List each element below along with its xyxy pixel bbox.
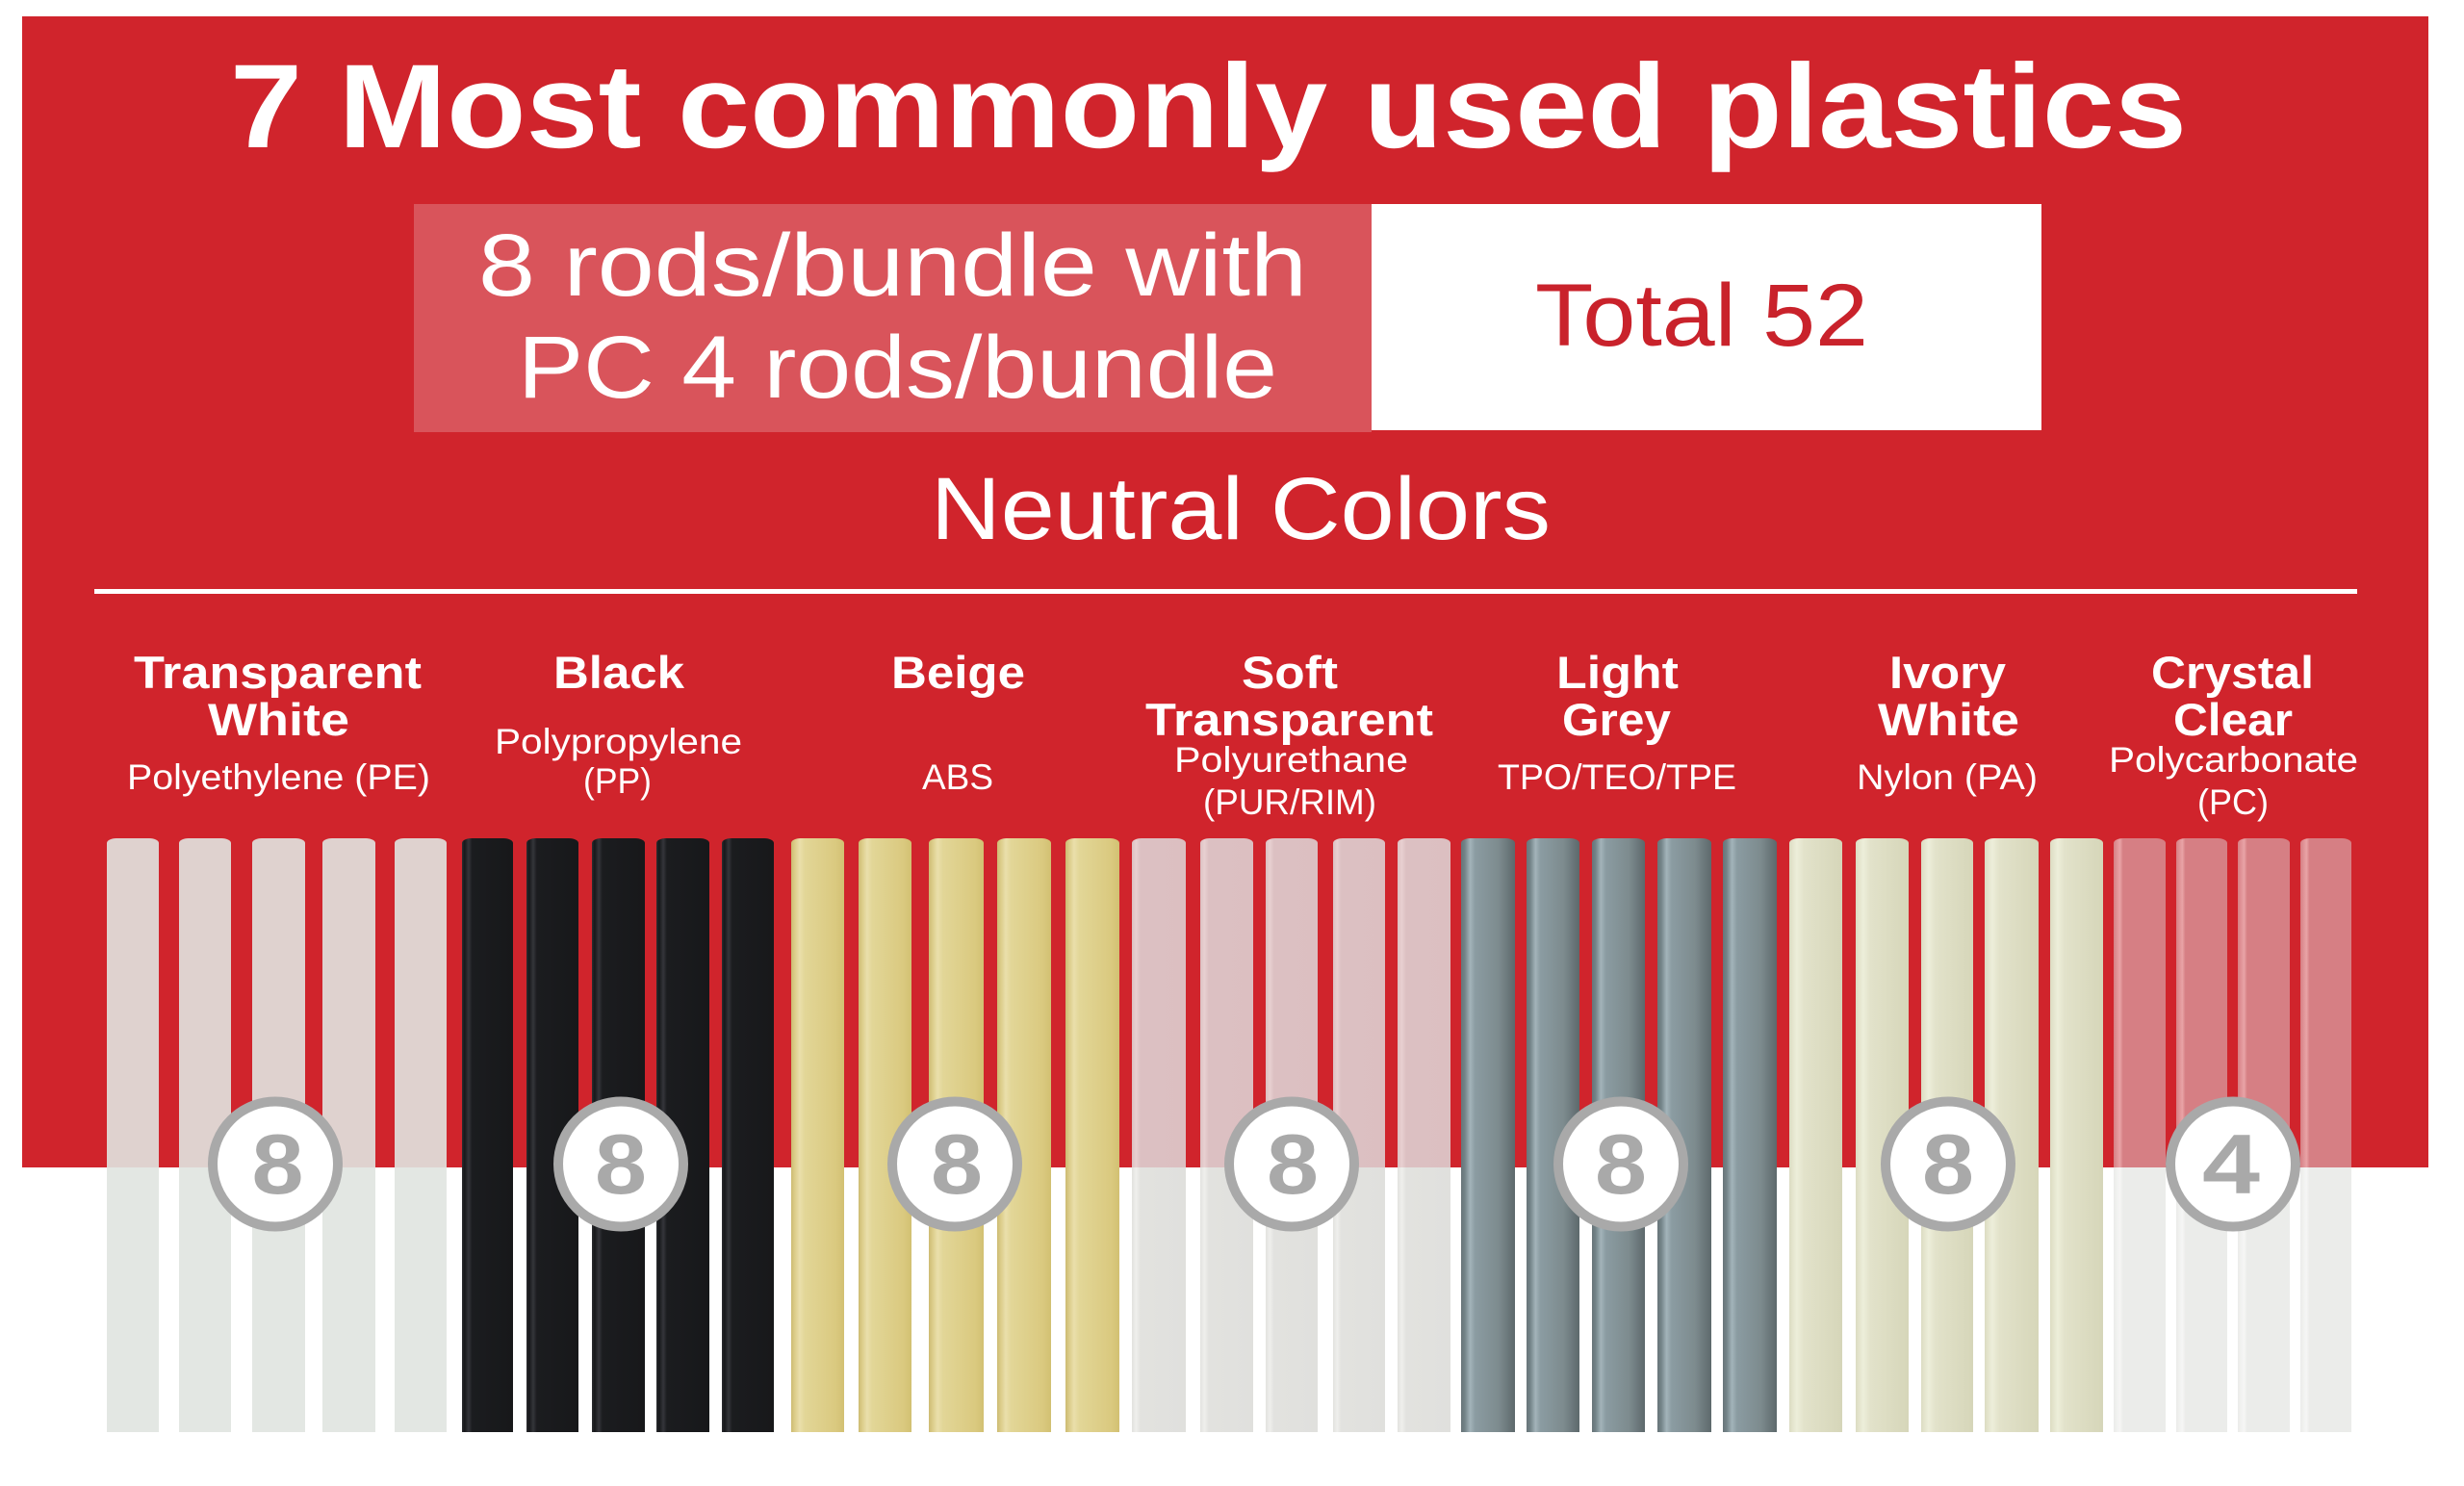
label: black polypropylene: (PP): [583, 761, 652, 801]
badge: light grey count 8: [1558, 1101, 1683, 1226]
label: ivory white nylon: Nylon (PA): [1857, 757, 2038, 797]
badge: ivory white count 8: 8: [1922, 1116, 1974, 1212]
label: beige ABS: Beige: [891, 647, 1025, 698]
label: black polypropylene: Polypropylene: [495, 722, 742, 761]
label: beige ABS: ABS: [922, 757, 993, 797]
label: transparent white polyethylene: Polyethylene (PE): [127, 757, 430, 797]
label: ivory white nylon: Ivory: [1889, 647, 2006, 698]
badge: crystal clear count 4: 4: [2202, 1116, 2260, 1212]
label: crystal clear polycarbonate: Clear: [2173, 694, 2293, 745]
rods: transparent white: [107, 838, 447, 1454]
label: black polypropylene: Black: [553, 647, 685, 698]
panel: total count: [1372, 204, 2041, 430]
text: bundle line one: 8 rods/bundle with: [478, 217, 1307, 315]
label: soft transparent polyurethane: Soft: [1242, 647, 1338, 698]
badge: soft transparent count 8: [1229, 1101, 1354, 1226]
badge: ivory white count 8: [1886, 1101, 2011, 1226]
text: bundle line two: PC 4 rods/bundle: [518, 319, 1277, 417]
label: black polypropylene: [495, 647, 742, 801]
label: soft transparent polyurethane: (PUR/RIM): [1203, 782, 1376, 822]
label: transparent white polyethylene: [127, 647, 430, 797]
badge: transparent white count 8: 8: [252, 1116, 304, 1212]
label: soft transparent polyurethane: Polyurethane: [1174, 740, 1408, 780]
badge: black count 8: [558, 1101, 683, 1226]
title: 7 Most commonly used plastics: [230, 40, 2187, 173]
label: ivory white nylon: [1857, 647, 2038, 797]
panel: bundle information: [414, 204, 1372, 432]
label: light grey TPO/TEO/TPE: Light: [1556, 647, 1679, 698]
rods: beige: [791, 838, 1119, 1454]
label: transparent white polyethylene: White: [208, 694, 349, 745]
badge: black count 8: 8: [595, 1116, 647, 1212]
label: light grey TPO/TEO/TPE: Grey: [1562, 694, 1671, 745]
badge: crystal clear count 4: [2170, 1101, 2296, 1226]
heading: neutral colors: Neutral Colors: [931, 460, 1551, 558]
rods: black: [462, 838, 774, 1454]
label: soft transparent polyurethane: Transparent: [1145, 694, 1433, 745]
rods: crystal clear: [2114, 838, 2351, 1454]
label: crystal clear polycarbonate: [2109, 647, 2358, 822]
badge: transparent white count 8: [213, 1101, 338, 1226]
badge: beige count 8: [892, 1101, 1017, 1226]
label: ivory white nylon: White: [1878, 694, 2019, 745]
rods: light grey: [1461, 838, 1777, 1454]
text: total 52: Total 52: [1535, 267, 1868, 365]
label: crystal clear polycarbonate: Crystal: [2151, 647, 2314, 698]
label: crystal clear polycarbonate: (PC): [2197, 782, 2269, 822]
rods: ivory white: [1789, 838, 2103, 1454]
rods: soft transparent: [1132, 838, 1450, 1454]
label: crystal clear polycarbonate: Polycarbonate: [2109, 740, 2358, 780]
label: light grey TPO/TEO/TPE: TPO/TEO/TPE: [1498, 757, 1736, 797]
red background panel: [22, 16, 2428, 1167]
badge: light grey count 8: 8: [1595, 1116, 1647, 1212]
label: transparent white polyethylene: Transparent: [134, 647, 422, 698]
label: beige ABS: [891, 647, 1025, 797]
label: light grey TPO/TEO/TPE: [1498, 647, 1736, 797]
badge: soft transparent count 8: 8: [1267, 1116, 1319, 1212]
label: soft transparent polyurethane: [1145, 647, 1433, 822]
badge: beige count 8: 8: [931, 1116, 983, 1212]
